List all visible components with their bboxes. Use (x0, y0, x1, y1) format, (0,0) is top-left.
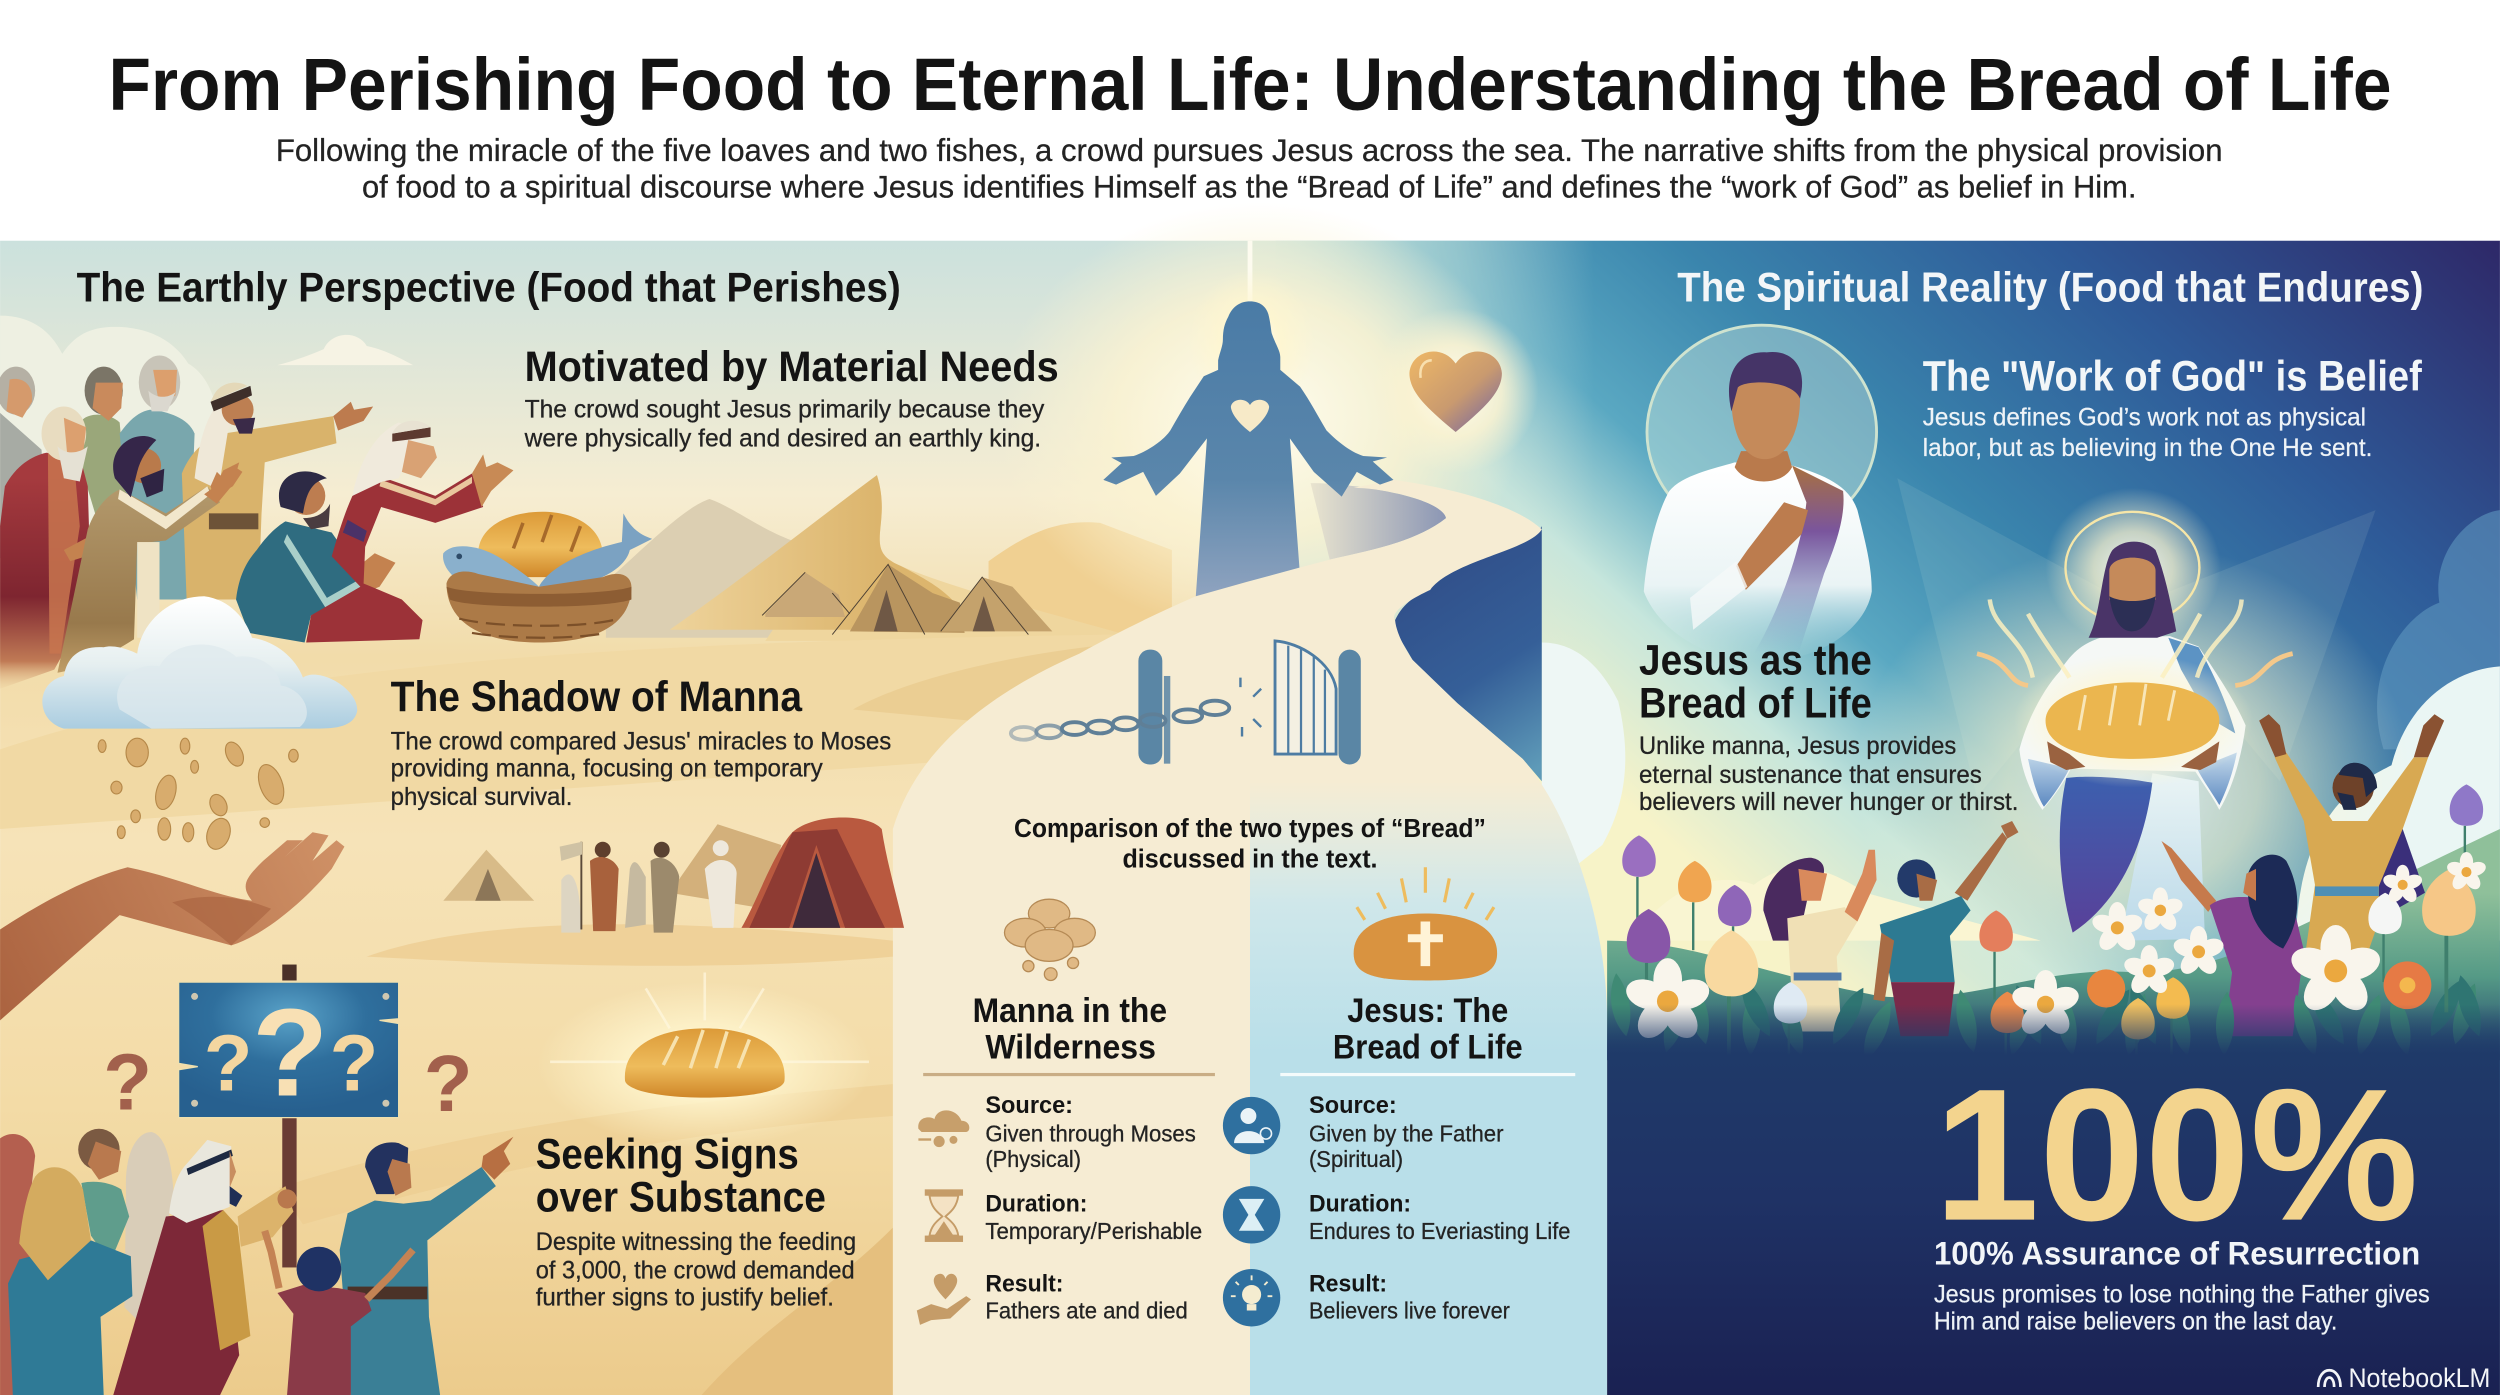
bearded man (78, 1129, 120, 1170)
body: seeking signs: Despite witnessing the feeding (536, 1229, 856, 1256)
row: manna duration: Duration: (985, 1191, 1087, 1218)
section heading: earthly: The Earthly Perspective (Food that Perishes) (77, 263, 901, 310)
brown robed man (57, 486, 220, 673)
body: seeking signs (536, 1229, 856, 1312)
panel: comparison arch (893, 480, 1607, 1395)
row: manna result (985, 1270, 1188, 1323)
teal kneeling man (236, 521, 365, 642)
illustration: question sign: ? (103, 1038, 152, 1127)
heading: motivated: Motivated by Material Needs (525, 343, 1059, 391)
row: manna duration: Temporary/Perishable (985, 1218, 1202, 1244)
fish left (443, 546, 539, 589)
bottom fade into navy (1607, 1004, 2500, 1395)
column heading: Jesus: Jesus: The (1347, 992, 1508, 1030)
subtitle: Following the miracle of the five loaves and two fishes, a crowd pursues Jesus across the sea. The narrative shifts from the physical provision (276, 132, 2223, 168)
body: work of God: Jesus defines God’s work not as physical (1923, 405, 2366, 432)
row: Jesus source (1309, 1092, 1504, 1172)
body: Jesus as bread (1639, 733, 2018, 816)
hooded woman in teal (8, 1240, 132, 1395)
far left figure (0, 1134, 35, 1395)
body: motivated: were physically fed and desired an earthly king. (524, 425, 1041, 452)
hair (2089, 542, 2176, 638)
icon: lightbulb result (1223, 1269, 1280, 1326)
illustration: Jesus holding bread (1854, 488, 2412, 1020)
row: Jesus result: Result: (1309, 1270, 1387, 1297)
row: Jesus result (1309, 1270, 1510, 1323)
stat body: Him and raise believers on the last day. (1934, 1309, 2337, 1336)
header background (0, 0, 2500, 241)
icon: heart on chest (1231, 400, 1269, 432)
follower: woman in cream (1763, 850, 1877, 1032)
body: manna: physical survival. (391, 784, 572, 811)
icon: source father (1223, 1097, 1280, 1154)
fish right (539, 513, 652, 587)
red elder (0, 453, 89, 689)
row: Jesus duration: Duration: (1309, 1191, 1411, 1218)
icon: duration hourglass (1223, 1186, 1280, 1244)
body: work of God (1923, 405, 2372, 462)
body: work of God: labor, but as believing in the One He sent. (1923, 435, 2372, 462)
column heading: manna: Manna in the (973, 992, 1167, 1030)
heading: Jesus as bread: Jesus as the (1639, 636, 1872, 684)
body: manna: The crowd compared Jesus' miracles to Moses (391, 728, 891, 755)
icon: source cloud (918, 1110, 969, 1147)
heading: manna: The Shadow of Manna (391, 673, 803, 721)
row: manna result: Result: (985, 1270, 1063, 1297)
flowers (1622, 835, 1656, 925)
icon: hourglass (925, 1189, 963, 1242)
panel: earthly background (0, 241, 1276, 1395)
icon: heart in hand (917, 1274, 971, 1325)
row: manna source: Given through Moses (985, 1121, 1196, 1147)
heading: work of God: The "Work of God" is Belief (1923, 353, 2422, 401)
follower: woman in purple (2161, 841, 2304, 1036)
pointing man (340, 1167, 496, 1395)
illustration: Jesus bust with halo (1644, 325, 1877, 662)
stat label: 100% Assurance of Resurrection (1934, 1234, 2420, 1271)
body: Jesus as bread: believers will never hunger or thirst. (1639, 789, 2018, 816)
comparison caption: Comparison of the two types of “Bread” (1014, 813, 1486, 843)
stat body: Jesus promises to lose nothing the Father gives (1934, 1282, 2430, 1309)
section heading: spiritual: The Spiritual Reality (Food that Endures) (1677, 263, 2423, 310)
logo: NotebookLM: NotebookLM (2348, 1362, 2490, 1393)
light beams (1897, 478, 2376, 797)
row: Jesus duration: Endures to Everiasting Life (1309, 1218, 1570, 1244)
green robe man (80, 415, 128, 526)
illustration: question sign: ? (330, 1018, 378, 1107)
body: Jesus as bread: eternal sustenance that ensures (1639, 762, 1982, 789)
child (277, 1285, 372, 1395)
subtitle: of food to a spiritual discourse where Jesus identifies Himself as the “Bread of Life” and defines the “work of God” as belief in Him. (362, 169, 2136, 205)
illustration: camp with Moses and tents (367, 817, 904, 966)
follower: boy (1873, 821, 2018, 1036)
illustration: basket with bread and fish (443, 512, 652, 642)
illustration: desert tents (762, 564, 1052, 635)
flames (1990, 599, 2242, 678)
illustration: falling manna (98, 738, 298, 853)
stat body (1934, 1282, 2430, 1336)
clouds right (2377, 510, 2500, 749)
icon: floating heart (1373, 308, 1539, 474)
row: manna source: Source: (985, 1092, 1073, 1119)
illustration: flower meadow and followers (1605, 714, 2500, 1395)
title: From Perishing Food to Eternal Life: Understanding the Bread of Life (108, 43, 2392, 126)
row: Jesus duration (1309, 1191, 1570, 1244)
small cloud (277, 335, 413, 365)
body: seeking signs: of 3,000, the crowd demanded (536, 1258, 855, 1285)
stat: 100%: 100% (1934, 1050, 2419, 1260)
central glow (997, 202, 1523, 633)
body: motivated (524, 397, 1045, 452)
icon: manna pile (1004, 899, 1095, 980)
icon: gate and broken chain (1011, 641, 1361, 764)
illustration: open hand (0, 832, 344, 1020)
illustration: question sign: ? (424, 1039, 472, 1128)
man with white headdress (113, 1210, 239, 1395)
body: manna (391, 728, 891, 811)
row: manna duration (985, 1191, 1202, 1244)
red kneeling woman (306, 474, 483, 642)
row: Jesus source: (Spiritual) (1309, 1146, 1403, 1172)
illustration: crowd pointing (0, 1129, 513, 1395)
body: seeking signs: further signs to justify belief. (536, 1285, 834, 1312)
icon: bread with cross (1354, 867, 1497, 980)
subtitle (276, 132, 2223, 205)
illustration: cloud (42, 596, 357, 729)
illustration: question sign: ? (204, 1018, 252, 1107)
comparison caption (1014, 813, 1486, 873)
body: manna: providing manna, focusing on temporary (391, 755, 823, 782)
illustration: question sign: ? (252, 983, 328, 1122)
background clouds behind crowd (0, 316, 220, 542)
heading: Jesus as bread: Bread of Life (1639, 679, 1872, 727)
grey elder (0, 413, 48, 558)
column heading: manna: Wilderness (985, 1029, 1156, 1067)
follower: man in yellow (2259, 714, 2444, 965)
heading: Jesus as bread (1639, 636, 1872, 727)
body: motivated: The crowd sought Jesus primarily because they (525, 397, 1045, 424)
body: Jesus as bread: Unlike manna, Jesus provides (1639, 733, 1956, 760)
cream hood figure (124, 1132, 174, 1323)
illustration: question sign (103, 965, 472, 1267)
top light ray (1248, 241, 1252, 308)
lower dune curves (279, 1084, 893, 1224)
tan man with arm out (182, 416, 336, 599)
row: Jesus result: Believers live forever (1309, 1297, 1510, 1323)
column heading: Jesus: Bread of Life (1333, 1029, 1523, 1067)
row: manna result: Fathers ate and died (985, 1297, 1188, 1323)
blue cliff and grey inner of the road (1311, 483, 1542, 781)
icon: Jesus silhouette (1103, 269, 1393, 596)
column heading: manna (973, 992, 1167, 1067)
heading: seeking signs: Seeking Signs (536, 1131, 799, 1179)
heading: seeking signs: over Substance (536, 1174, 826, 1222)
row: manna source (985, 1092, 1196, 1172)
heading: seeking signs (536, 1131, 826, 1222)
leaves (1605, 958, 2489, 1064)
blue robe elder (120, 410, 195, 599)
comparison caption: discussed in the text. (1122, 843, 1378, 873)
row: manna source: (Physical) (985, 1146, 1081, 1172)
basket (446, 571, 631, 642)
illustration: crowd reaching (0, 356, 513, 689)
panel: spiritual background (1250, 241, 2500, 1395)
illustration: glowing bread (537, 973, 872, 1148)
dunes (606, 499, 829, 638)
arm to the pole (238, 1186, 293, 1247)
column heading: Jesus (1333, 992, 1523, 1067)
row: Jesus source: Source: (1309, 1092, 1397, 1119)
row: Jesus source: Given by the Father (1309, 1121, 1504, 1147)
